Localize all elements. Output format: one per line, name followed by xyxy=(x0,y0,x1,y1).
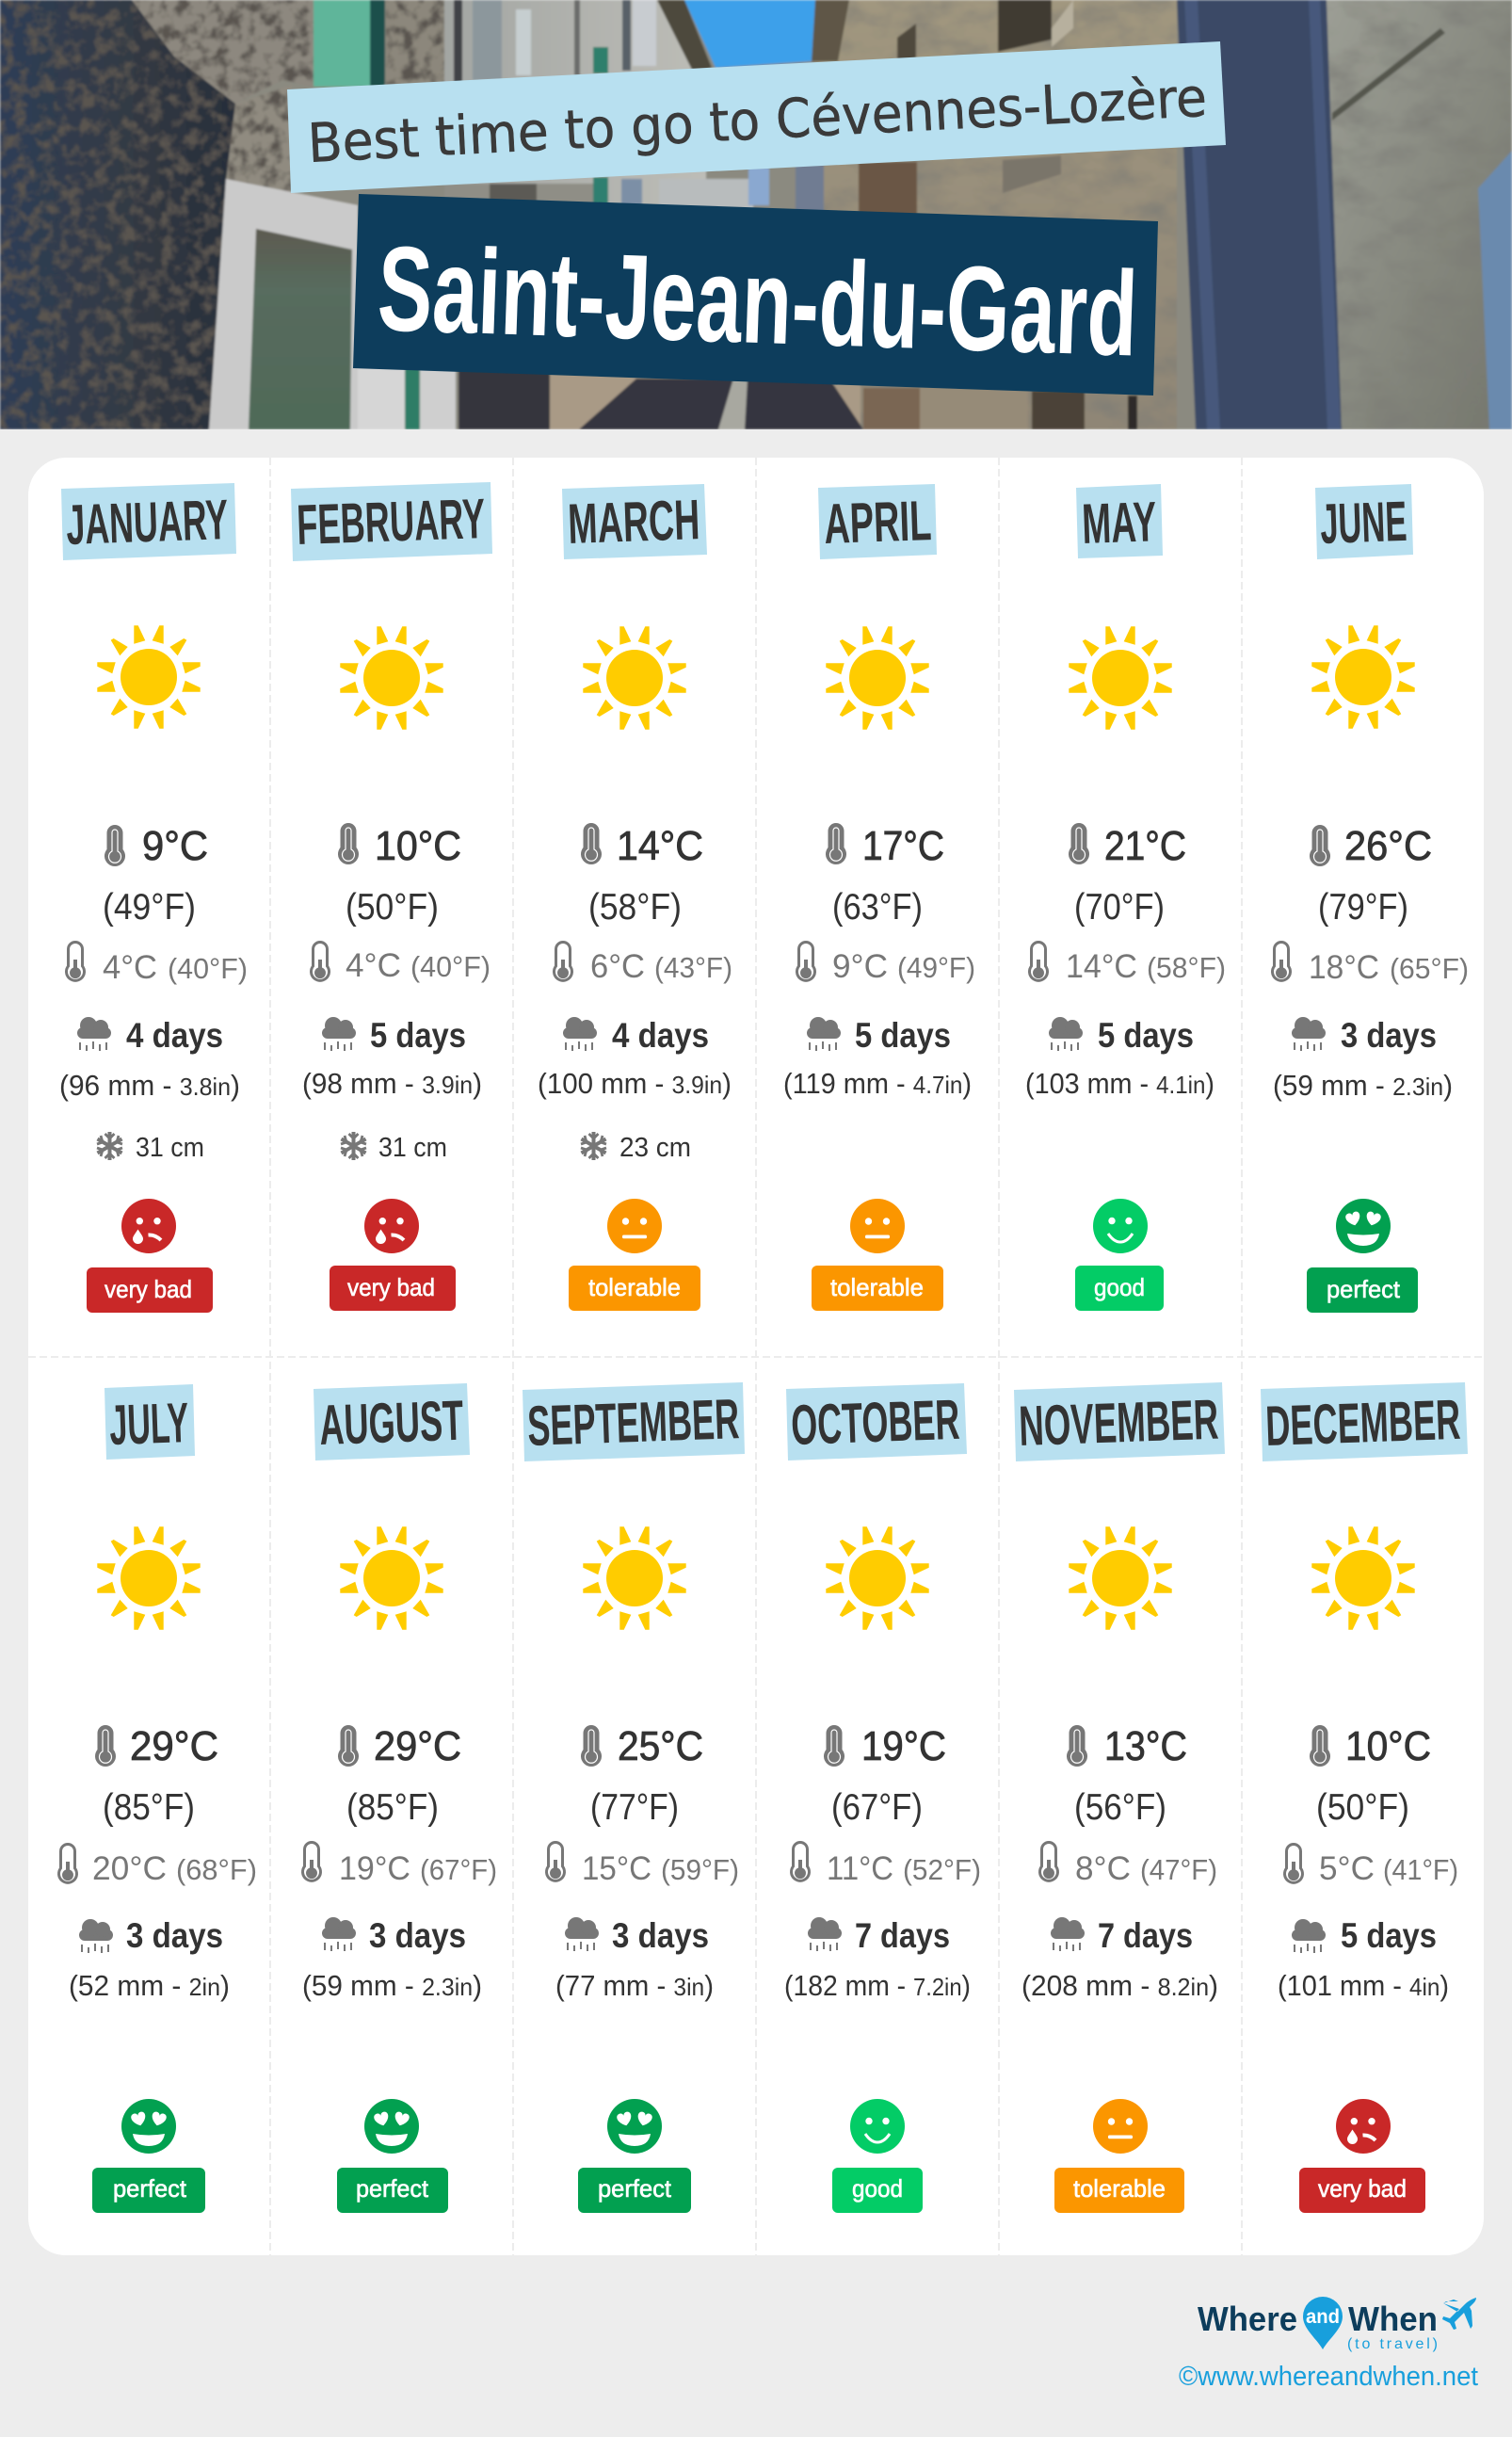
rainy days: 5 days xyxy=(370,1016,466,1055)
rating badge: perfect xyxy=(356,2174,429,2203)
high temperature in fahrenheit: (85°F) xyxy=(103,1787,195,1828)
month: December xyxy=(1261,1382,1468,2213)
high temperature: 14°C xyxy=(617,823,703,869)
month label: OCTOBER xyxy=(790,1388,960,1457)
icon: smiling face xyxy=(850,2099,905,2154)
rating badge: perfect xyxy=(598,2174,672,2203)
low temperature: 6°C xyxy=(590,948,645,985)
rainy days: 7 days xyxy=(855,1916,950,1955)
precipitation: (59 mm - 2.3in) xyxy=(1273,1069,1453,1102)
rainy days: 5 days xyxy=(1341,1916,1437,1955)
rainy days xyxy=(322,1016,466,1055)
website credit: ©www.whereandwhen.net xyxy=(1179,2362,1478,2392)
low temperature: (68°F) xyxy=(176,1853,257,1886)
precipitation: (77 mm - 3in) xyxy=(555,1969,714,2002)
rating badge xyxy=(832,2168,923,2213)
icon: sun xyxy=(1069,626,1172,730)
month: November xyxy=(1014,1382,1225,2213)
month label: JUNE xyxy=(1319,490,1407,556)
rating badge: good xyxy=(1094,1273,1145,1301)
rainy days: 3 days xyxy=(612,1916,709,1955)
month: April xyxy=(783,484,975,1311)
low temperature xyxy=(58,1844,257,1887)
high temperature: 19°C xyxy=(861,1723,946,1769)
rainy days xyxy=(807,1016,951,1055)
icon: neutral face xyxy=(607,1199,662,1253)
rating badge xyxy=(87,1267,213,1313)
high temperature xyxy=(826,823,944,869)
high temperature in fahrenheit: (49°F) xyxy=(103,887,196,928)
title banner xyxy=(353,194,1158,395)
icon: heart-eyes face xyxy=(364,2099,419,2154)
low temperature: 9°C xyxy=(832,948,888,985)
rainy days xyxy=(1049,1016,1194,1055)
month label xyxy=(786,1383,967,1461)
month label xyxy=(1315,484,1413,559)
high temperature in fahrenheit: (85°F) xyxy=(346,1787,439,1828)
high temperature in fahrenheit: (70°F) xyxy=(1074,887,1165,928)
high temperature xyxy=(95,1723,218,1769)
month label: JULY xyxy=(108,1391,189,1457)
month: May xyxy=(1025,484,1226,1311)
icon: crying face xyxy=(121,1199,176,1253)
high temperature xyxy=(824,1723,946,1769)
icon: crying face xyxy=(364,1199,419,1253)
snowfall xyxy=(97,1132,204,1163)
rating badge xyxy=(578,2168,691,2213)
month label xyxy=(1076,484,1163,558)
title banner: Saint-Jean-du-Gard xyxy=(376,221,1139,382)
low temperature: (40°F) xyxy=(410,950,491,983)
high temperature in fahrenheit: (63°F) xyxy=(832,887,923,928)
snowfall: 31 cm xyxy=(378,1133,447,1163)
high temperature xyxy=(1067,1723,1187,1769)
rainy days: 3 days xyxy=(126,1916,223,1955)
low temperature xyxy=(1039,1842,1217,1887)
rating badge xyxy=(330,1266,456,1311)
icon: sun xyxy=(583,1526,686,1630)
low temperature xyxy=(1030,942,1226,985)
month label xyxy=(105,1384,195,1460)
rainy days xyxy=(565,1916,709,1955)
high temperature in fahrenheit: (58°F) xyxy=(588,887,682,928)
month label xyxy=(291,482,492,561)
low temperature: (49°F) xyxy=(897,951,975,984)
rating badge: very bad xyxy=(347,1273,435,1301)
rating badge: very bad xyxy=(1318,2174,1407,2203)
high temperature: 29°C xyxy=(130,1723,218,1769)
precipitation: (103 mm - 4.1in) xyxy=(1025,1067,1214,1100)
rating badge: tolerable xyxy=(588,1273,681,1301)
panel: monthly calendar card xyxy=(28,458,1484,2255)
rainy days: 3 days xyxy=(1341,1016,1437,1055)
low temperature: (67°F) xyxy=(420,1853,497,1886)
icon: neutral face xyxy=(1093,2099,1148,2154)
rating badge xyxy=(1054,2168,1184,2213)
low temperature: 4°C xyxy=(346,947,401,984)
low temperature xyxy=(796,942,975,985)
high temperature in fahrenheit: (56°F) xyxy=(1074,1787,1166,1828)
month: February xyxy=(291,482,492,1311)
rating badge: perfect xyxy=(1327,1275,1401,1303)
precipitation: (119 mm - 4.7in) xyxy=(783,1067,972,1100)
icon: sun xyxy=(826,626,929,730)
high temperature: 17°C xyxy=(862,823,944,869)
rating badge xyxy=(1299,2168,1425,2213)
month label xyxy=(523,1382,745,1461)
high temperature: 26°C xyxy=(1344,823,1432,869)
month: September xyxy=(523,1382,745,2213)
precipitation: (182 mm - 7.2in) xyxy=(784,1969,971,2002)
month: July xyxy=(58,1384,257,2213)
precipitation: (98 mm - 3.9in) xyxy=(302,1067,482,1100)
low temperature xyxy=(311,942,491,984)
high temperature: 29°C xyxy=(374,1723,461,1769)
high temperature xyxy=(581,823,703,869)
snowfall: 31 cm xyxy=(136,1133,204,1163)
hero photo: narrow village street xyxy=(0,0,1512,429)
icon: sun xyxy=(97,1526,201,1630)
rating badge: tolerable xyxy=(830,1273,924,1301)
rainy days xyxy=(322,1916,466,1955)
high temperature in fahrenheit: (79°F) xyxy=(1318,887,1408,928)
icon: heart-eyes face xyxy=(121,2099,176,2154)
low temperature xyxy=(303,1842,497,1887)
logo: Where and When (to travel): and xyxy=(1306,2306,1340,2328)
low temperature xyxy=(1284,1844,1458,1887)
icon: sun xyxy=(340,626,443,730)
low temperature: 20°C xyxy=(92,1850,167,1887)
rainy days xyxy=(1292,1016,1437,1055)
month label xyxy=(562,484,707,559)
rating badge xyxy=(1075,1266,1164,1311)
rainy days: 5 days xyxy=(1098,1016,1194,1055)
icon: sun xyxy=(1069,1526,1172,1630)
low temperature: (43°F) xyxy=(654,951,732,984)
rainy days xyxy=(79,1916,223,1955)
rating badge: very bad xyxy=(105,1275,192,1303)
rating badge: tolerable xyxy=(1073,2174,1166,2203)
snowfall xyxy=(581,1132,691,1163)
month label: SEPTEMBER xyxy=(526,1387,740,1458)
low temperature xyxy=(1273,942,1469,986)
low temperature: 4°C xyxy=(103,949,157,986)
rating badge xyxy=(337,2168,448,2213)
icon: neutral face xyxy=(850,1199,905,1253)
low temperature: 18°C xyxy=(1309,949,1379,986)
month label: AUGUST xyxy=(318,1389,464,1457)
precipitation: (101 mm - 4in) xyxy=(1278,1969,1449,2002)
month: August xyxy=(302,1383,497,2213)
rating badge: perfect xyxy=(113,2174,187,2203)
icon: smiling face xyxy=(1093,1199,1148,1253)
high temperature in fahrenheit: (77°F) xyxy=(590,1787,679,1828)
high temperature in fahrenheit: (67°F) xyxy=(831,1787,923,1828)
rainy days: 5 days xyxy=(855,1016,951,1055)
high temperature xyxy=(338,823,461,869)
high temperature: 25°C xyxy=(618,1723,703,1769)
month label xyxy=(1014,1382,1225,1461)
low temperature xyxy=(554,942,732,985)
snowfall: 23 cm xyxy=(619,1133,691,1163)
precipitation: (52 mm - 2in) xyxy=(69,1969,230,2002)
low temperature: (58°F) xyxy=(1147,951,1226,984)
low temperature: 8°C xyxy=(1075,1850,1131,1887)
rainy days xyxy=(77,1016,223,1055)
logo: Where and When (to travel): Where xyxy=(1198,2300,1297,2338)
high temperature in fahrenheit: (50°F) xyxy=(1316,1787,1409,1828)
rating badge xyxy=(569,1266,700,1311)
high temperature xyxy=(1069,823,1186,869)
low temperature: 15°C xyxy=(582,1850,651,1887)
low temperature: (52°F) xyxy=(903,1853,981,1886)
icon: heart-eyes face xyxy=(1336,1199,1391,1253)
rating badge xyxy=(812,1266,943,1311)
low temperature: 11°C xyxy=(827,1850,893,1887)
low temperature: (47°F) xyxy=(1140,1853,1217,1886)
month label xyxy=(61,483,236,560)
month label xyxy=(314,1383,470,1461)
high temperature: 10°C xyxy=(1345,1723,1431,1769)
high temperature xyxy=(105,823,208,869)
precipitation: (96 mm - 3.8in) xyxy=(59,1069,240,1102)
icon: sun xyxy=(1311,1526,1415,1630)
month label: JANUARY xyxy=(65,488,229,557)
rainy days: 3 days xyxy=(369,1916,466,1955)
icon: crying face xyxy=(1336,2099,1391,2154)
precipitation: (208 mm - 8.2in) xyxy=(1021,1969,1218,2002)
subtitle banner: Best time to go to Cévennes-Lozère xyxy=(306,67,1208,175)
logo: Where and When (to travel) xyxy=(1198,2297,1476,2352)
rating badge xyxy=(92,2168,205,2213)
low temperature: (40°F) xyxy=(168,952,248,985)
rainy days xyxy=(1292,1916,1437,1955)
month label: FEBRUARY xyxy=(296,487,486,557)
month: January xyxy=(59,483,248,1313)
month label xyxy=(818,484,937,559)
low temperature: (59°F) xyxy=(661,1853,739,1886)
high temperature xyxy=(581,1723,703,1769)
logo: Where and When (to travel): When xyxy=(1348,2300,1438,2338)
rating badge: good xyxy=(852,2174,903,2203)
high temperature xyxy=(338,1723,461,1769)
low temperature: 19°C xyxy=(339,1850,410,1887)
subtitle banner xyxy=(287,41,1226,193)
month: June xyxy=(1273,484,1469,1313)
precipitation: (59 mm - 2.3in) xyxy=(302,1969,482,2002)
icon: sun xyxy=(1311,625,1415,729)
low temperature xyxy=(66,942,248,986)
precipitation: (100 mm - 3.9in) xyxy=(538,1067,732,1100)
month label: NOVEMBER xyxy=(1018,1388,1219,1458)
rainy days: 4 days xyxy=(126,1016,223,1055)
high temperature xyxy=(1310,1723,1431,1769)
month: March xyxy=(538,484,732,1311)
rating badge xyxy=(1307,1267,1418,1313)
month: October xyxy=(784,1383,981,2213)
low temperature: (65°F) xyxy=(1390,952,1469,985)
month label: MAY xyxy=(1081,490,1157,556)
rainy days xyxy=(808,1916,950,1955)
high temperature: 13°C xyxy=(1104,1723,1187,1769)
low temperature: (41°F) xyxy=(1383,1853,1458,1886)
icon: sun xyxy=(97,625,201,729)
rainy days: 7 days xyxy=(1098,1916,1193,1955)
low temperature: 14°C xyxy=(1066,948,1137,985)
snowfall xyxy=(341,1132,447,1163)
low temperature xyxy=(546,1842,739,1887)
month label: APRIL xyxy=(823,489,932,556)
icon: sun xyxy=(340,1526,443,1630)
logo: Where and When (to travel): (to travel) xyxy=(1347,2336,1438,2352)
icon: heart-eyes face xyxy=(607,2099,662,2154)
high temperature in fahrenheit: (50°F) xyxy=(346,887,439,928)
high temperature: 21°C xyxy=(1104,823,1186,869)
icon: sun xyxy=(826,1526,929,1630)
low temperature: 5°C xyxy=(1319,1850,1375,1887)
low temperature xyxy=(791,1842,981,1887)
rainy days xyxy=(1051,1916,1193,1955)
icon: sun xyxy=(583,626,686,730)
rainy days xyxy=(563,1016,709,1055)
high temperature xyxy=(1310,823,1432,869)
high temperature: 10°C xyxy=(375,823,461,869)
month label: MARCH xyxy=(567,488,700,556)
high temperature: 9°C xyxy=(142,823,208,869)
rainy days: 4 days xyxy=(612,1016,709,1055)
